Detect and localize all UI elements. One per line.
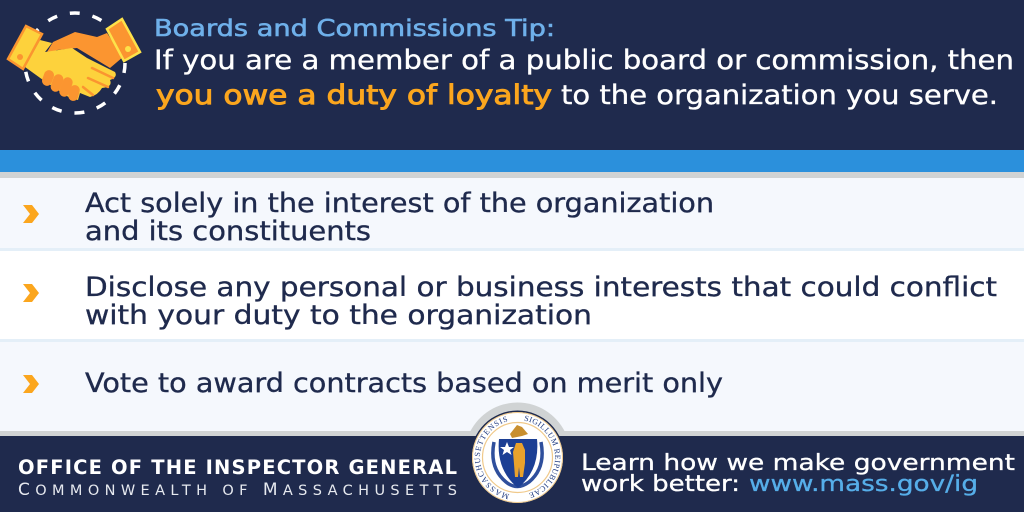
text: work better: work better: [581, 472, 740, 497]
text: item two [85, 272, 997, 331]
blue band [0, 150, 1024, 172]
text: learn more: Learn how we make government [581, 451, 1015, 476]
heading: tip title: Boards and Commissions Tip: [154, 16, 555, 42]
text: item two: with your duty to the organization [85, 300, 592, 331]
text: item three: Vote to award contracts based on merit only [85, 368, 723, 399]
text: intro line one: If you are a member of a public board or commission, then [154, 45, 1014, 76]
panel: footer [0, 436, 1024, 512]
icon: right cuff [107, 19, 140, 61]
icon: state seal: SIGILLUM REIPUBLICAE [524, 416, 560, 498]
text: item one: and its constituents [85, 216, 371, 247]
icon: handshake [8, 13, 140, 113]
text: item two: Disclose any personal or business interests that could conflict [85, 272, 997, 303]
panel: header [0, 0, 1024, 150]
panel: row two [0, 251, 1024, 339]
text: item one [85, 188, 714, 247]
text: highlighted duty of loyalty: you owe a duty of loyalty [156, 80, 552, 111]
icon: chevron two [23, 284, 39, 302]
text: commonwealth: C OMMONWEALTH OF M ASSACHUSETTS [18, 480, 457, 500]
icon: state seal [470, 402, 564, 503]
icon: state seal: MASSACHUSETTENSIS [474, 416, 510, 500]
panel: row one [0, 178, 1024, 248]
text: item one: Act solely in the interest of the organization [85, 188, 714, 219]
icon: left cuff [8, 26, 42, 69]
panel: row three [0, 342, 1024, 431]
text: office name: OFFICE OF THE INSPECTOR GENERAL [18, 456, 457, 479]
text: website link: www.mass.gov/ig [749, 472, 978, 497]
icon: chevron one [23, 205, 39, 223]
icon: chevron three [23, 375, 39, 393]
text: intro line two: to the organization you serve. [561, 80, 998, 111]
